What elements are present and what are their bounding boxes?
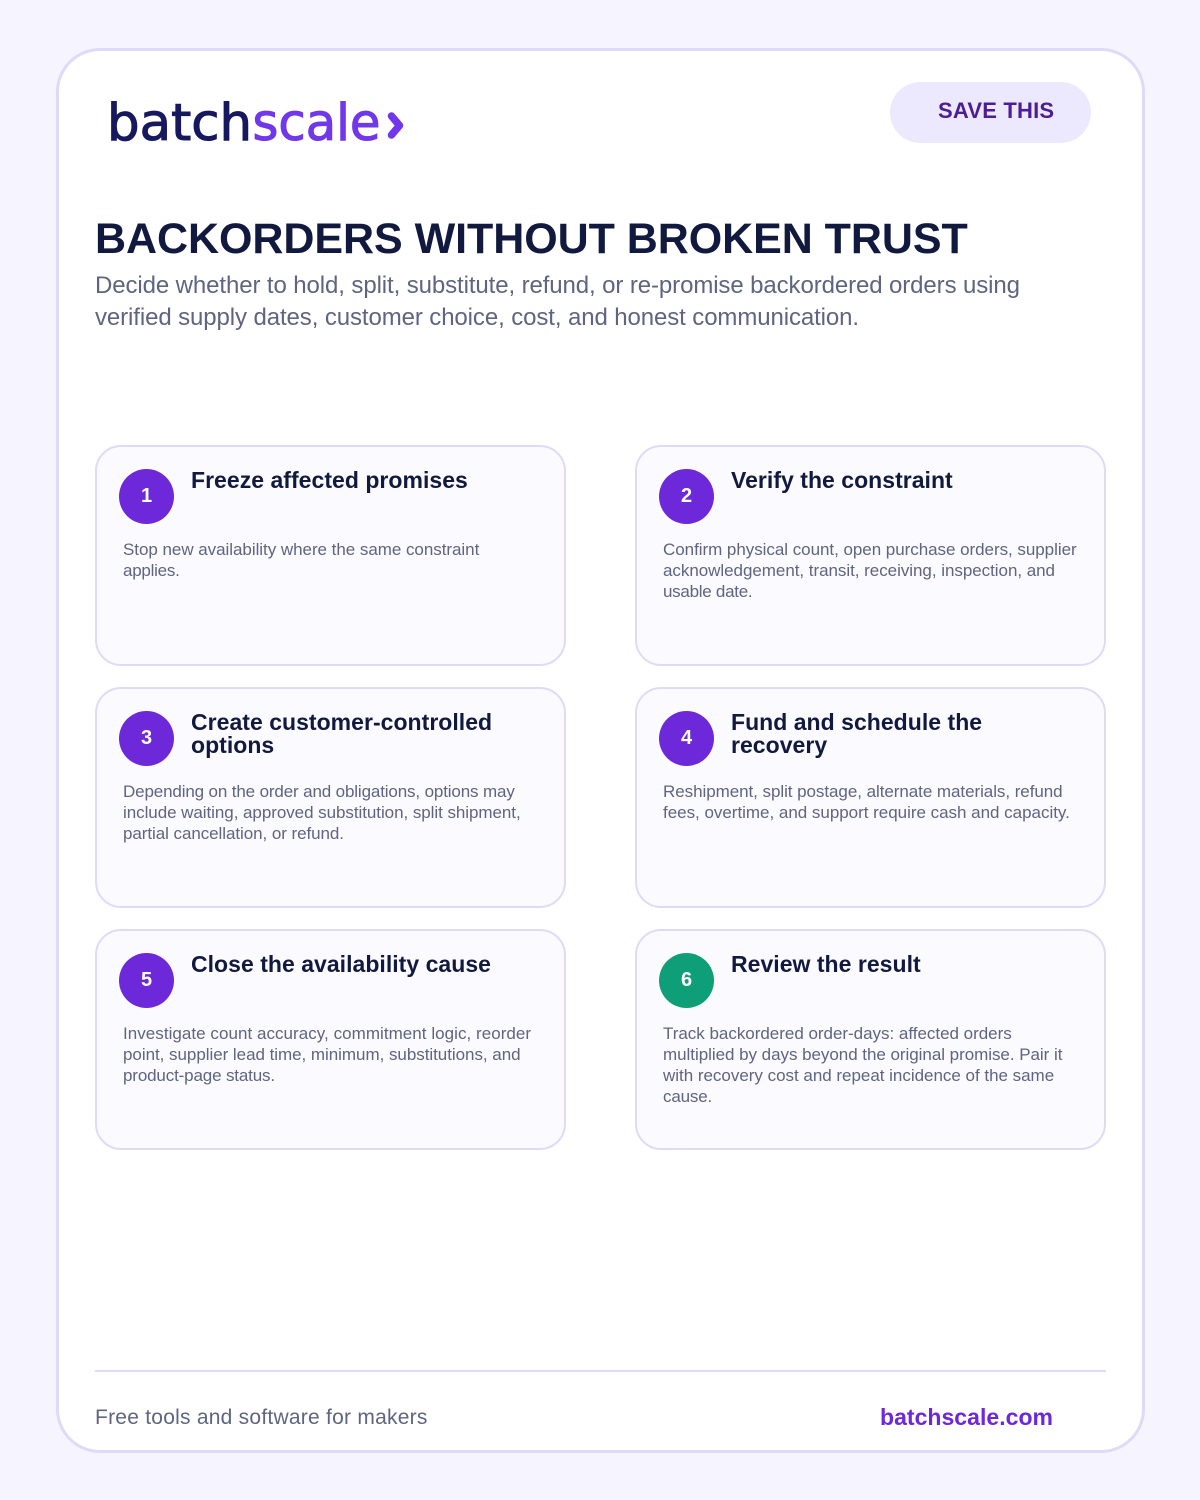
step 6 text: multiplied by days beyond the original promise. Pair it — [663, 1045, 1062, 1064]
step 1 text — [123, 540, 480, 580]
panel: step 4 — [635, 687, 1106, 908]
step 4 heading: Fund and schedule the — [731, 709, 982, 735]
step 4 heading: recovery — [731, 732, 827, 758]
step 5 heading: Close the availability cause — [191, 951, 491, 977]
subtitle: verified supply dates, customer choice, cost, and honest communication. — [95, 304, 859, 331]
footer url: batchscale.com — [880, 1404, 1053, 1430]
step 2 text — [663, 540, 1077, 601]
step 5 text: product-page status. — [123, 1066, 275, 1085]
step 2 heading: Verify the constraint — [731, 467, 953, 493]
step 5 number: 5 — [141, 969, 152, 991]
logo: batchscale: batch — [107, 94, 252, 153]
step 4 text: Reshipment, split postage, alternate materials, refund — [663, 782, 1063, 801]
step 2 number — [659, 469, 714, 524]
step 1 heading: Freeze affected promises — [191, 467, 468, 493]
step 5 text — [123, 1024, 531, 1085]
step 4 number — [659, 711, 714, 766]
step 3 text: include waiting, approved substitution, split shipment, — [123, 803, 521, 822]
logo: batchscale — [107, 94, 404, 153]
step 3 text: partial cancellation, or refund. — [123, 824, 344, 843]
step 3 heading — [191, 709, 492, 758]
step 1 text: applies. — [123, 561, 180, 580]
logo: batchscale: scale — [252, 94, 380, 153]
panel: step 3 — [95, 687, 566, 908]
step 1 number — [119, 469, 174, 524]
step 4 number: 4 — [681, 727, 692, 749]
panel: step 5 — [95, 929, 566, 1150]
step 1 text: Stop new availability where the same constraint — [123, 540, 479, 559]
step 4 heading — [731, 709, 982, 758]
step 4 text — [663, 782, 1070, 822]
panel: step 6 — [635, 929, 1106, 1150]
step 5 text: Investigate count accuracy, commitment logic, reorder — [123, 1024, 531, 1043]
step 4 text: fees, overtime, and support require cash and capacity. — [663, 803, 1070, 822]
panel: step 2 — [635, 445, 1106, 666]
step 5 number — [119, 953, 174, 1008]
step 3 heading: Create customer-controlled — [191, 709, 492, 735]
step 5 text: point, supplier lead time, minimum, substitutions, and — [123, 1045, 521, 1064]
step 3 text — [123, 782, 521, 843]
title: BACKORDERS WITHOUT BROKEN TRUST — [95, 215, 968, 263]
save this badge: SAVE THIS — [938, 98, 1054, 123]
step 3 heading: options — [191, 732, 274, 758]
subtitle: Decide whether to hold, split, substitute, refund, or re-promise backordered orders using — [95, 272, 1020, 299]
step 1 number: 1 — [141, 485, 152, 507]
step 2 number: 2 — [681, 485, 692, 507]
step 2 text: usable date. — [663, 582, 752, 601]
footer tagline: Free tools and software for makers — [95, 1406, 428, 1429]
step 6 text — [663, 1024, 1062, 1106]
step 6 number — [659, 953, 714, 1008]
step 3 number: 3 — [141, 727, 152, 749]
step 2 text: Confirm physical count, open purchase orders, supplier — [663, 540, 1077, 559]
step 6 text: with recovery cost and repeat incidence of the same — [663, 1066, 1054, 1085]
step 3 number — [119, 711, 174, 766]
panel: step 1 — [95, 445, 566, 666]
step 6 number: 6 — [681, 969, 692, 991]
step 3 text: Depending on the order and obligations, options may — [123, 782, 515, 801]
step 2 text: acknowledgement, transit, receiving, inspection, and — [663, 561, 1055, 580]
subtitle — [95, 272, 1020, 331]
save this badge — [890, 82, 1091, 143]
step 6 text: cause. — [663, 1087, 712, 1106]
step 6 heading: Review the result — [731, 951, 921, 977]
step 6 text: Track backordered order-days: affected orders — [663, 1024, 1012, 1043]
